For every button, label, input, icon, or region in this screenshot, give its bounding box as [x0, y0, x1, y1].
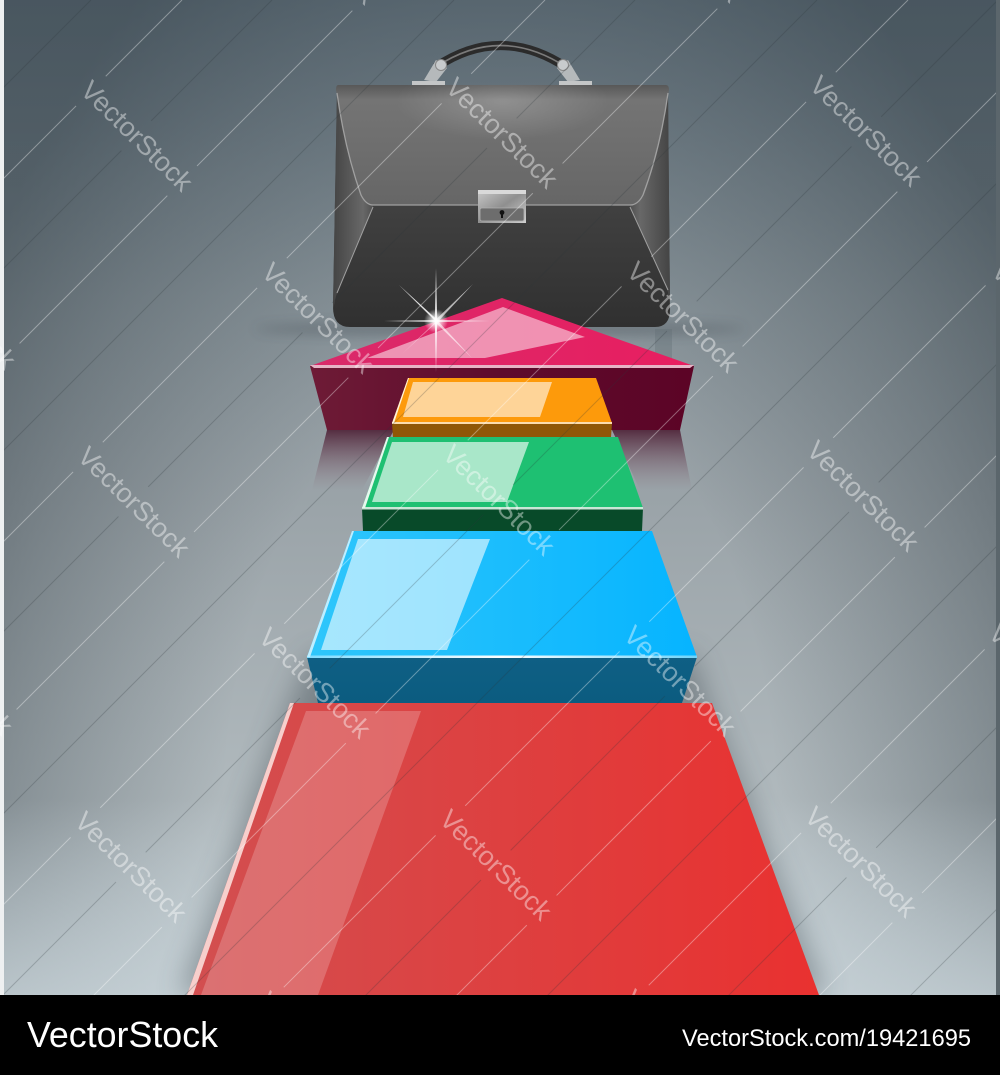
watermarks: VectorStock	[618, 620, 742, 743]
footer logo text: VectorStock	[27, 1014, 219, 1055]
icon: briefcase	[333, 46, 670, 327]
step 3: green block	[362, 437, 643, 531]
red highlight	[201, 711, 421, 995]
briefcase right gusset	[630, 90, 670, 310]
watermarks: VectorStock	[621, 256, 745, 379]
reflections under the pink block	[312, 329, 692, 490]
watermarks: VectorStock	[801, 435, 925, 558]
watermarks: VectorStock	[434, 804, 558, 927]
watermarks: VectorStock	[253, 622, 377, 745]
pink highlight	[367, 307, 585, 358]
briefcase flap	[336, 85, 669, 205]
watermarks: VectorStock	[256, 257, 380, 380]
step 4: blue block	[307, 531, 697, 703]
briefcase handle	[412, 46, 592, 86]
watermarks: VectorStock	[799, 801, 923, 924]
watermarks: VectorStock	[440, 72, 564, 195]
icon: sparkle	[384, 268, 490, 372]
watermarks: VectorStock	[69, 806, 193, 929]
briefcase left gusset	[333, 90, 373, 310]
watermarks: VectorStock	[72, 441, 196, 564]
step 5: red block	[187, 703, 819, 995]
briefcase stitching lines	[337, 93, 668, 293]
block shadows on the floor	[180, 655, 826, 995]
briefcase floor shadow	[255, 322, 745, 336]
step 2: orange block	[392, 378, 612, 437]
watermarks: VectorStock	[75, 75, 199, 198]
watermarks: VectorStock	[804, 70, 928, 193]
green highlight	[372, 442, 529, 502]
blue highlight	[321, 539, 490, 650]
footer image id: VectorStock.com/19421695	[682, 1025, 971, 1052]
footer bar	[0, 995, 1000, 1075]
step 1: pink block	[310, 298, 694, 430]
watermarks: VectorStock	[437, 439, 561, 562]
briefcase clasp	[478, 190, 526, 223]
orange highlight	[403, 382, 552, 417]
briefcase body	[333, 90, 670, 327]
